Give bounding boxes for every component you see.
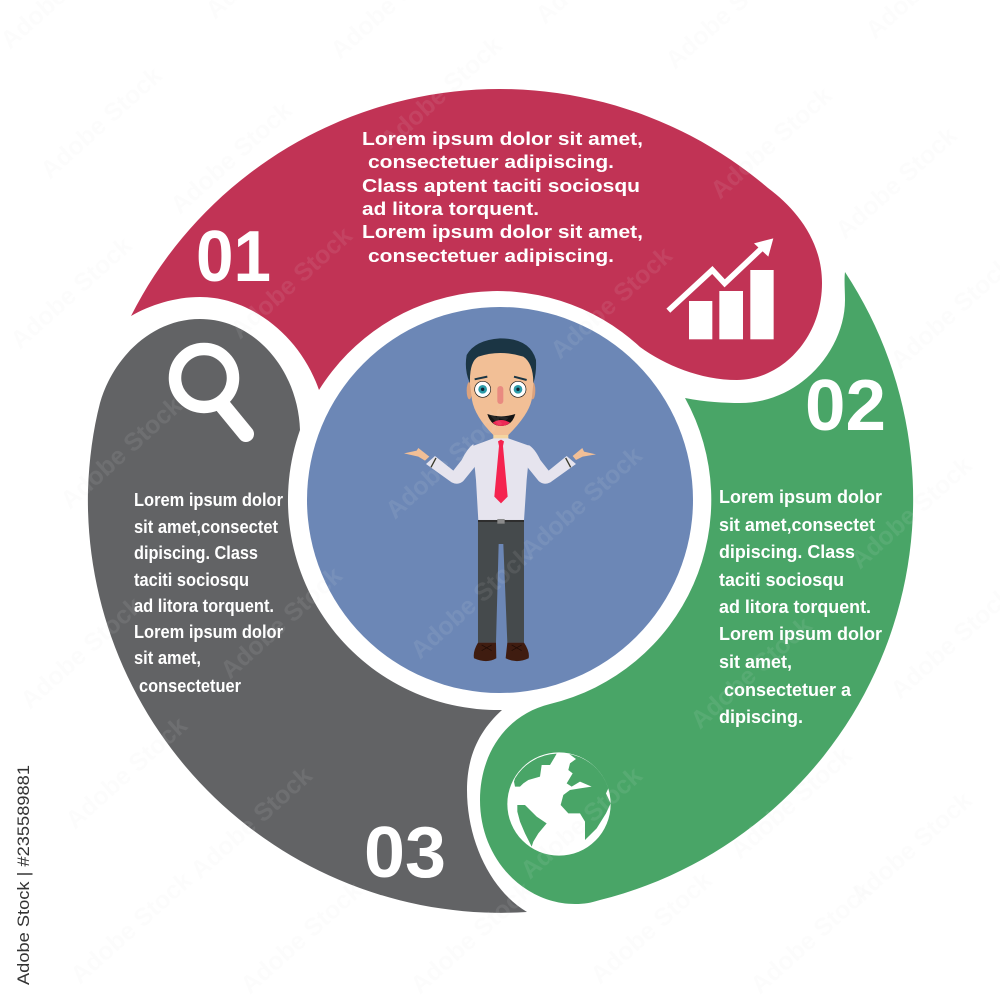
watermark pattern: Adobe Stock xyxy=(35,61,168,184)
figure: cartoon businessman xyxy=(404,338,596,661)
heading: number 01: 01 xyxy=(196,217,271,297)
text block: grey segment: Lorem ipsum dolor xyxy=(134,622,283,642)
watermark pattern: Adobe Stock xyxy=(235,876,368,999)
watermark pattern: Adobe Stock xyxy=(65,866,198,989)
panel: central blue circle xyxy=(307,307,693,693)
text block: red segment: Class aptent taciti sociosqu xyxy=(362,176,640,196)
text block: green segment: Lorem ipsum dolor xyxy=(719,487,882,507)
text block: green segment xyxy=(719,487,882,727)
watermark pattern: Adobe Stock xyxy=(5,231,138,354)
text block: grey segment: dipiscing. Class xyxy=(134,543,258,563)
text block: green segment: sit amet,consectet xyxy=(719,515,875,535)
text block: green segment: sit amet, xyxy=(719,652,792,672)
watermark pattern: Adobe Stock xyxy=(515,761,648,884)
watermark pattern: Adobe Stock xyxy=(165,96,298,219)
text block: red segment: Lorem ipsum dolor sit amet, xyxy=(362,129,643,149)
heading: number 03: 03 xyxy=(364,813,446,893)
icon: magnifying glass xyxy=(175,349,246,434)
face xyxy=(470,353,533,435)
watermark pattern: Adobe Stock xyxy=(60,711,193,834)
watermark pattern: Adobe Stock xyxy=(405,541,538,664)
watermark pattern: Adobe Stock xyxy=(185,761,318,884)
text block: red segment: consectetuer adipiscing. xyxy=(368,246,614,266)
watermark pattern: Adobe Stock xyxy=(830,121,963,244)
panel: red segment 01 xyxy=(131,89,822,390)
watermark pattern: Adobe Stock xyxy=(845,451,978,574)
text block: grey segment: sit amet,consectet xyxy=(134,517,278,537)
watermark pattern: Adobe Stock xyxy=(705,81,838,204)
text block: grey segment: consectetuer xyxy=(139,676,241,696)
nose xyxy=(497,386,503,404)
watermark pattern: Adobe Stock xyxy=(55,391,188,514)
icon: globe xyxy=(507,752,611,856)
watermark pattern: Adobe Stock xyxy=(225,221,358,344)
shirt cuffs xyxy=(431,458,571,467)
shoe laces xyxy=(482,645,522,651)
watermark pattern: Adobe Stock xyxy=(845,786,978,909)
text block: green segment: Lorem ipsum dolor xyxy=(719,624,882,644)
mouth xyxy=(487,414,515,426)
trousers xyxy=(478,521,524,643)
watermark pattern: Adobe Stock xyxy=(515,441,648,564)
watermark pattern: Adobe Stock xyxy=(725,741,858,864)
necktie xyxy=(494,440,508,503)
watermark pattern: Adobe Stock xyxy=(585,866,718,989)
text block: red segment xyxy=(362,129,643,266)
text block: grey segment: Lorem ipsum dolor xyxy=(134,490,283,510)
watermark pattern: Adobe Stock xyxy=(685,611,818,734)
text block: grey segment xyxy=(134,490,283,696)
eyes xyxy=(475,381,526,397)
text block: grey segment: sit amet, xyxy=(134,648,201,668)
text block: green segment: consectetuer a xyxy=(724,680,852,700)
belt xyxy=(478,520,524,522)
shoes xyxy=(474,643,529,661)
text block: green segment: taciti sociosqu xyxy=(719,570,844,590)
arms xyxy=(426,444,576,484)
watermark pattern: Adobe Stock xyxy=(215,561,348,684)
heading: number 02: 02 xyxy=(805,366,886,446)
watermark pattern: Adobe Stock xyxy=(405,876,538,999)
text block: green segment: dipiscing. Class xyxy=(719,542,855,562)
watermark pattern: Adobe Stock xyxy=(380,401,513,524)
text block: red segment: consectetuer adipiscing. xyxy=(368,152,614,172)
text block: grey segment: taciti sociosqu xyxy=(134,570,249,590)
hair xyxy=(466,338,536,383)
neck xyxy=(493,430,508,442)
ears xyxy=(467,382,472,399)
hands xyxy=(404,448,596,461)
stock image credit: Adobe Stock | #235589881 xyxy=(14,765,33,985)
watermark pattern: Adobe Stock xyxy=(375,31,508,154)
text block: green segment: ad litora torquent. xyxy=(719,597,871,617)
watermark pattern: Adobe Stock xyxy=(745,876,878,999)
shirt xyxy=(473,438,530,521)
icon: growth bar chart with arrow xyxy=(668,238,774,339)
watermark pattern: Adobe Stock xyxy=(545,241,678,364)
text block: green segment: dipiscing. xyxy=(719,707,803,727)
text block: grey segment: ad litora torquent. xyxy=(134,596,274,616)
text block: red segment: Lorem ipsum dolor sit amet, xyxy=(362,222,643,242)
panel: grey segment 03 xyxy=(88,319,527,913)
eyebrows xyxy=(475,377,527,380)
text block: red segment: ad litora torquent. xyxy=(362,199,539,219)
panel: green segment 02 xyxy=(480,272,913,904)
watermark pattern: Adobe Stock xyxy=(15,591,148,714)
